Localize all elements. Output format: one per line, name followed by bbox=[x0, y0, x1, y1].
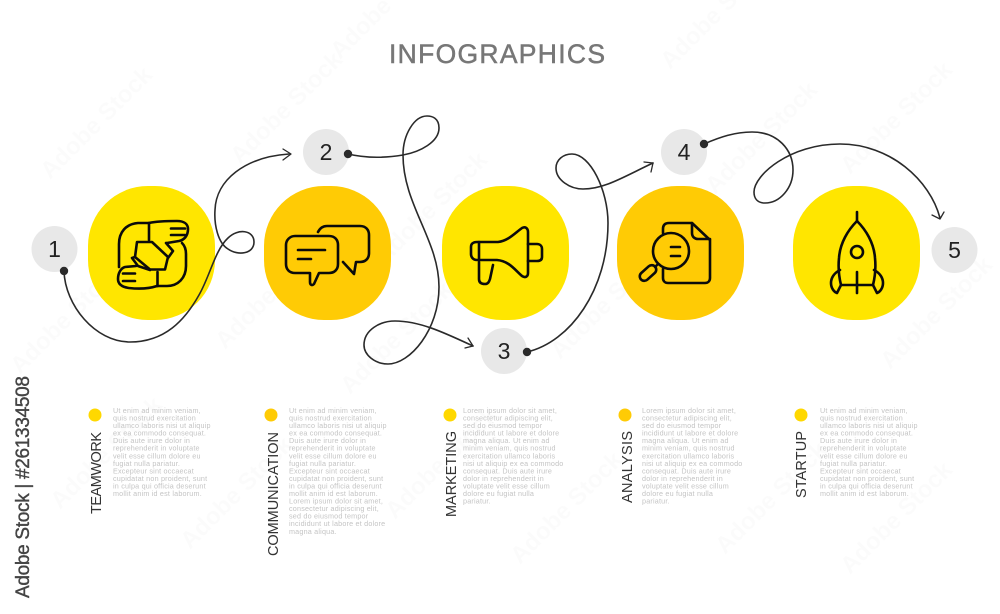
caption: communication: fugiat nulla pariatur. bbox=[289, 459, 356, 468]
caption: analysis: sed do eiusmod tempor bbox=[642, 421, 722, 430]
stock id side text: Adobe Stock | #261334508 bbox=[13, 376, 34, 598]
caption: marketing: exercitation ullamco laboris bbox=[463, 451, 555, 460]
text: Adobe Stock bbox=[45, 391, 168, 514]
step 1 badge bbox=[32, 226, 78, 272]
text: Adobe Stock bbox=[545, 241, 668, 364]
step 2 badge bbox=[303, 129, 349, 175]
caption: startup: STARTUP bbox=[794, 431, 810, 498]
caption: marketing: magna aliqua. Ut enim ad bbox=[463, 436, 550, 445]
caption: communication: Excepteur sint occaecat bbox=[289, 466, 370, 475]
caption: teamwork bbox=[88, 406, 213, 514]
caption: startup: mollit anim id est laborum. bbox=[820, 489, 909, 498]
arrow: step 2 to 3 bbox=[344, 116, 473, 364]
caption: analysis: Lorem ipsum dolor sit amet, bbox=[642, 406, 736, 415]
caption: communication: mollit anim id est laborum. bbox=[289, 489, 378, 498]
text: Adobe Stock bbox=[835, 456, 958, 579]
caption: analysis: exercitation ullamco laboris bbox=[642, 451, 734, 460]
caption: marketing: consectetur adipiscing elit, bbox=[463, 414, 553, 422]
panel: marketing blob bbox=[442, 186, 569, 320]
text: Adobe Stock bbox=[835, 56, 958, 179]
step 3 badge bbox=[481, 328, 527, 374]
text: Adobe Stock bbox=[335, 276, 458, 399]
caption: teamwork: cupidatat non proident, sunt bbox=[113, 474, 207, 483]
text: Adobe Stock bbox=[380, 401, 503, 524]
step 3 badge: 3 bbox=[498, 338, 510, 364]
text: Adobe Stock bbox=[35, 61, 158, 184]
arrow: step 3 to 4 bbox=[523, 154, 653, 356]
text: Adobe Stock bbox=[5, 256, 128, 379]
caption: marketing: voluptate velit esse cillum bbox=[463, 482, 550, 490]
caption: startup: Duis aute irure dolor in bbox=[820, 436, 897, 445]
caption: marketing: minim veniam, quis nostrud bbox=[463, 444, 556, 453]
caption: communication: cupidatat non proident, sunt bbox=[289, 474, 383, 483]
caption: communication: ex ea commodo consequat. bbox=[289, 429, 382, 438]
caption: communication: Lorem ipsum dolor sit amet, bbox=[289, 497, 383, 506]
text: Adobe Stock bbox=[875, 251, 998, 374]
caption: startup: Ut enim ad minim veniam, bbox=[820, 406, 908, 415]
caption: teamwork: ex ea commodo consequat. bbox=[113, 429, 206, 438]
caption: analysis: nisi ut aliquip ex ea commodo bbox=[642, 459, 742, 468]
text: Adobe Stock bbox=[370, 146, 493, 269]
caption: marketing: nisi ut aliquip ex ea commodo bbox=[463, 459, 564, 468]
caption: teamwork: mollit anim id est laborum. bbox=[113, 489, 202, 498]
caption: communication: quis nostrud exercitation bbox=[289, 414, 372, 422]
caption: analysis: dolor in reprehenderit in bbox=[642, 474, 723, 483]
caption: marketing: incididunt ut labore et dolore bbox=[463, 429, 559, 438]
caption: analysis: magna aliqua. Ut enim ad bbox=[642, 436, 729, 445]
caption: startup: reprehenderit in voluptate bbox=[820, 444, 907, 453]
caption: communication: consectetur adipiscing elit, bbox=[289, 504, 379, 513]
step 2 badge: 2 bbox=[320, 139, 332, 165]
text: Adobe Stock bbox=[700, 76, 823, 199]
panel: analysis blob bbox=[617, 186, 744, 320]
caption: communication bbox=[264, 406, 389, 556]
caption: teamwork: quis nostrud exercitation bbox=[113, 414, 196, 422]
caption: analysis bbox=[618, 406, 745, 506]
caption: analysis: dolore eu fugiat nulla bbox=[642, 489, 713, 498]
text: Adobe Stock bbox=[210, 231, 333, 354]
caption: teamwork: in culpa qui officia deserunt bbox=[113, 482, 206, 490]
icon: document with magnifier bbox=[638, 223, 710, 283]
text: Adobe Stock bbox=[505, 446, 628, 569]
caption: teamwork: TEAMWORK bbox=[89, 432, 105, 514]
caption: communication: Ut enim ad minim veniam, bbox=[289, 406, 377, 415]
arrow: step 4 to 5 bbox=[700, 132, 944, 219]
panel: communication blob bbox=[264, 186, 391, 320]
caption: marketing: consequat. Duis aute irure bbox=[463, 466, 552, 475]
caption: startup: cupidatat non proident, sunt bbox=[820, 474, 914, 483]
caption: startup: ullamco laboris nisi ut aliquip bbox=[820, 421, 918, 430]
step 1 badge: 1 bbox=[48, 236, 61, 262]
panel: teamwork blob bbox=[88, 186, 215, 320]
text: Adobe Stock bbox=[175, 431, 298, 554]
text: Adobe Stock bbox=[710, 436, 833, 559]
caption: teamwork: Ut enim ad minim veniam, bbox=[113, 406, 201, 415]
text: Adobe Stock bbox=[225, 46, 348, 169]
step 4 badge: 4 bbox=[678, 139, 691, 165]
caption: analysis: minim veniam, quis nostrud bbox=[642, 444, 735, 453]
caption: marketing bbox=[444, 406, 566, 517]
arrow: step 1 to 2 bbox=[60, 149, 291, 342]
caption: teamwork: fugiat nulla pariatur. bbox=[113, 459, 180, 468]
caption: communication: Duis aute irure dolor in bbox=[289, 436, 366, 445]
caption: teamwork: reprehenderit in voluptate bbox=[113, 444, 200, 453]
caption: analysis: consequat. Duis aute irure bbox=[642, 466, 731, 475]
step 4 badge bbox=[661, 129, 707, 175]
caption: teamwork: Duis aute irure dolor in bbox=[113, 436, 190, 445]
caption: startup: fugiat nulla pariatur. bbox=[820, 459, 887, 468]
icon: megaphone bbox=[471, 227, 542, 284]
caption: marketing: dolor in reprehenderit in bbox=[463, 474, 544, 483]
caption: marketing: MARKETING bbox=[444, 431, 460, 517]
icon: chat bubbles bbox=[286, 226, 369, 285]
caption: communication: reprehenderit in voluptate bbox=[289, 444, 376, 453]
caption: communication: COMMUNICATION bbox=[266, 432, 282, 556]
caption: startup: velit esse cillum dolore eu bbox=[820, 451, 908, 460]
caption: startup: ex ea commodo consequat. bbox=[820, 429, 913, 438]
caption: communication: ullamco laboris nisi ut aliquip bbox=[289, 421, 387, 430]
caption: communication: sed do eiusmod tempor bbox=[289, 512, 369, 521]
caption: communication: incididunt ut labore et dolore bbox=[289, 519, 385, 528]
caption: marketing: Lorem ipsum dolor sit amet, bbox=[463, 406, 557, 415]
icon: teamwork hands bbox=[118, 221, 188, 289]
caption: analysis: ANALYSIS bbox=[620, 431, 636, 503]
caption: startup: in culpa qui officia deserunt bbox=[820, 482, 913, 490]
caption: communication: in culpa qui officia deserunt bbox=[289, 482, 382, 490]
caption: startup bbox=[794, 406, 920, 498]
title: INFOGRAPHICS bbox=[389, 39, 605, 69]
caption: teamwork: velit esse cillum dolore eu bbox=[113, 451, 201, 460]
panel: startup blob bbox=[793, 186, 920, 320]
step 5 badge bbox=[932, 227, 978, 273]
caption: marketing: sed do eiusmod tempor bbox=[463, 421, 543, 430]
caption: analysis: voluptate velit esse cillum bbox=[642, 482, 729, 490]
caption: teamwork: Excepteur sint occaecat bbox=[113, 466, 194, 475]
caption: teamwork: ullamco laboris nisi ut aliquip bbox=[113, 421, 211, 430]
caption: analysis: consectetur adipiscing elit, bbox=[642, 414, 732, 422]
caption: communication: magna aliqua. bbox=[289, 527, 337, 536]
caption: marketing: dolore eu fugiat nulla bbox=[463, 489, 534, 498]
step 5 badge: 5 bbox=[948, 237, 961, 263]
icon: rocket bbox=[831, 212, 883, 293]
caption: analysis: pariatur. bbox=[642, 497, 670, 506]
caption: startup: quis nostrud exercitation bbox=[820, 414, 903, 422]
caption: communication: velit esse cillum dolore eu bbox=[289, 451, 377, 460]
caption: marketing: pariatur. bbox=[463, 497, 491, 506]
caption: analysis: incididunt ut labore et dolore bbox=[642, 429, 738, 438]
caption: startup: Excepteur sint occaecat bbox=[820, 466, 901, 475]
